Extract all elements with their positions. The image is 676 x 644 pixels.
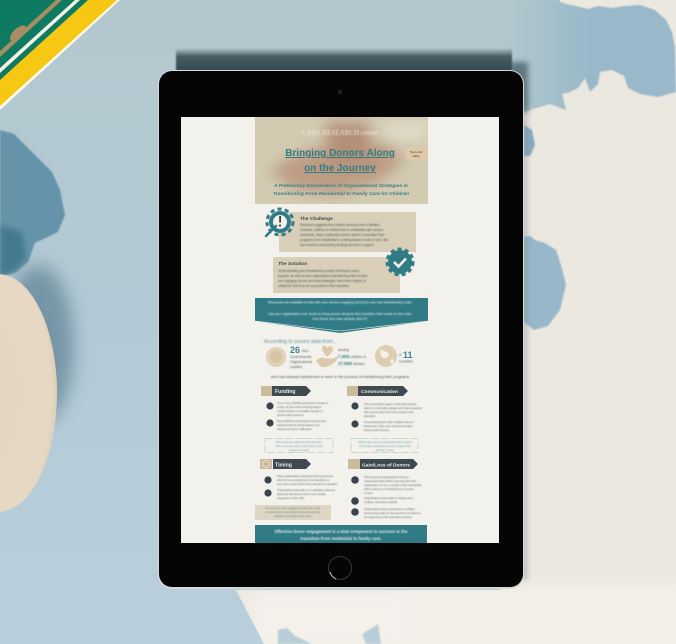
badge: article xyxy=(412,154,420,158)
panel: the challenge: Research suggests that children develop best in families. xyxy=(300,223,381,227)
bullet list: approach felt donors were more readily xyxy=(277,492,326,496)
tablet xyxy=(158,48,528,589)
section: communication: Communication xyxy=(361,389,398,395)
banner: teal call to action xyxy=(255,298,428,333)
footer: teal conclusion: transition from residential to family care. xyxy=(301,536,381,541)
home button xyxy=(328,556,352,580)
panel: the solution: Understanding how transitioning models will impact donor xyxy=(278,269,360,273)
paint patch: top right xyxy=(500,0,676,112)
bullet list: 57% reported organizations losing a xyxy=(364,475,409,479)
footer: teal conclusion xyxy=(255,525,427,543)
paint patch: dark blob on the left xyxy=(0,130,65,276)
bullet list: of care. xyxy=(364,491,374,495)
icon: seal xyxy=(266,347,286,367)
stat: 26 leaders: Organizational xyxy=(290,360,312,364)
bullet list: found strong gain of new donors or funders at xyxy=(364,511,421,515)
stat: 11 countries: 11 xyxy=(403,350,413,360)
callout: Many donors supported the transition xyxy=(276,440,323,444)
stat: 26 leaders: 26 xyxy=(290,345,300,355)
icon: timing xyxy=(260,459,272,469)
stat: children and families: serving xyxy=(338,348,349,352)
bullet list: funding, sometimes quickly. xyxy=(364,500,398,504)
stat: 26 leaders: Leaders xyxy=(290,365,303,369)
subtitle: A Preliminary Examination of Organizational Strategies in xyxy=(273,183,408,189)
callout: some also expressed concerns about the xyxy=(360,444,411,448)
bullet list: donors with concerns. xyxy=(277,413,304,417)
infographic header xyxy=(255,117,428,204)
corner book: green and yellow xyxy=(0,0,120,110)
panel: the challenge: However, millions of children live in residential care centers xyxy=(300,228,384,232)
footer: teal conclusion: Effective donor engagement is a vital component to success in the xyxy=(275,529,408,534)
bullet list: the beginning of the transition process. xyxy=(364,515,412,519)
callout xyxy=(351,438,418,452)
banner: teal call to action: Resources are available to help with your donors engaging during the care and transitioning model. xyxy=(268,300,412,304)
plate: beige dish on the left xyxy=(0,265,74,512)
panel: the challenge: worldwide. Many residential centers desire to transition their xyxy=(300,233,385,237)
subtitle xyxy=(273,183,409,197)
panel: the challenge: The Challenge xyxy=(300,216,333,222)
stat: 11 countries: countries xyxy=(399,360,413,364)
section: timing xyxy=(255,459,338,520)
panel: the solution: critical for NGOs to be successful in their transition. xyxy=(278,284,350,288)
stat: 11 countries: in xyxy=(399,353,402,357)
title: on the Journey xyxy=(304,163,376,174)
bullet list xyxy=(351,402,423,432)
bullet list: organization to run, a couple of the substantial xyxy=(364,483,422,487)
icon: hand with heart xyxy=(316,346,338,367)
title xyxy=(285,148,395,174)
bullet list: funds, as did a third of family-based xyxy=(277,405,322,409)
bullet list: Presenting donors with multiple ways of xyxy=(364,420,413,424)
title: Bringing Donors Along xyxy=(285,148,395,159)
paint patch: right edge xyxy=(524,236,566,330)
bullet list: One-in-four (28.8%) perceived a threat to xyxy=(277,401,328,405)
bullet list: with donors about the new program and xyxy=(364,410,414,414)
camera xyxy=(338,90,342,94)
callout: program as well. xyxy=(289,448,309,452)
paint patch: bottom xyxy=(278,628,312,644)
callout xyxy=(265,438,333,452)
panel: the solution: support, as well as how organizations transitioning their models xyxy=(278,274,368,278)
organisation name: CARE RESEARCH center xyxy=(302,129,379,137)
callout: change in care. xyxy=(375,448,395,452)
icon: communication xyxy=(347,386,358,396)
survey data heading: According to survey data from... xyxy=(264,339,337,345)
callout: While many donors responded with support xyxy=(358,440,412,444)
banner: teal call to action: Has your organization ever desire to bring donors along as they transition their model of care learn xyxy=(268,312,412,316)
screen xyxy=(181,117,499,543)
bullet list: supportive of the shift. xyxy=(277,496,305,500)
stat: children and families: 27,888 families xyxy=(338,361,365,366)
panel: the challenge: programs from residential to a family-based model of care. But xyxy=(300,238,388,242)
badge: Tap to full xyxy=(410,150,422,154)
section: funding xyxy=(261,386,333,452)
panel: the solution xyxy=(273,257,400,293)
icon: gain/loss xyxy=(348,459,360,469)
section: timing: Timing xyxy=(275,462,292,468)
stat: 26 leaders xyxy=(266,345,312,369)
stat: children and families: 7,656 children & xyxy=(338,354,367,359)
callout: transition to family-based care. xyxy=(274,514,312,518)
bullet list xyxy=(266,401,328,431)
callout: process were more likely to stay through the xyxy=(266,510,321,514)
panel: the challenge: face barriers surrounding funding and donor support. xyxy=(300,243,375,247)
panel: the solution: are engaging donors and what strategies have been helpful, is xyxy=(278,279,366,283)
bullet list: citing some donor difficulties. xyxy=(277,427,313,431)
bullet list xyxy=(264,474,338,500)
section: funding: Funding xyxy=(275,389,295,395)
section: gain/loss of donors xyxy=(348,459,422,519)
stat: 11 countries xyxy=(375,345,413,367)
subtitle: Transitioning From Residential to Family Care for Children xyxy=(273,191,409,197)
bullet list: Organizations that did so in a gradual, planned xyxy=(277,488,335,492)
bullet list: The most helpful ways of informing donors xyxy=(364,402,417,406)
icon: funding xyxy=(261,386,272,396)
bullet list: Most (59.8%) respondents found it hard xyxy=(277,419,327,423)
stat: 26 leaders: Governmental xyxy=(290,355,312,359)
icon: gear with wrench and exclamation xyxy=(266,209,293,236)
icon: globe xyxy=(375,345,397,367)
callout: with a one-time gift at the outset of the xyxy=(275,444,323,448)
section: communication xyxy=(347,386,423,452)
callout xyxy=(255,505,331,520)
bullet list: Organizations were able to replace lost xyxy=(364,496,413,500)
badge xyxy=(405,147,428,160)
bullet list: Most organizations reported informing donors xyxy=(277,474,334,478)
bullet list: helped with success. xyxy=(364,428,390,432)
bullet list: shift in donors or beneficial loss of some xyxy=(364,487,414,491)
survey data note: who had already transitioned or were in the process of transitioning their programs xyxy=(271,375,409,379)
bullet list: substantial share (40%) reported their first xyxy=(364,479,416,483)
bullet list: standard. xyxy=(364,414,376,418)
banner: teal call to action: from those who have already done it? xyxy=(313,317,368,321)
bullet list: less than a year before they decided to transition. xyxy=(277,482,338,486)
stat: children and families xyxy=(316,346,367,367)
bullet list: after the very beginning of the transition or xyxy=(277,478,329,482)
icon: gear with check mark xyxy=(387,249,413,275)
stat: 26 leaders: Non- xyxy=(302,349,309,353)
header photo: blurred hands xyxy=(270,122,428,195)
section: gain/loss of donors: Gain/Loss of Donors xyxy=(362,462,410,468)
bullet list: model centers in a smaller sample of xyxy=(277,409,323,413)
bullet list: were to continually engage and share progress xyxy=(364,406,423,410)
panel: the challenge xyxy=(279,212,416,252)
panel: the solution: The Solution xyxy=(278,261,307,267)
bullet list: raising funds for family-based care, xyxy=(277,423,321,427)
bullet list: being part of the care environment also xyxy=(364,424,413,428)
bullet list xyxy=(351,475,422,519)
callout: Donors who were engaged at the start of the xyxy=(265,506,321,510)
bullet list: Organizations who transitioned or shifted xyxy=(364,507,415,511)
